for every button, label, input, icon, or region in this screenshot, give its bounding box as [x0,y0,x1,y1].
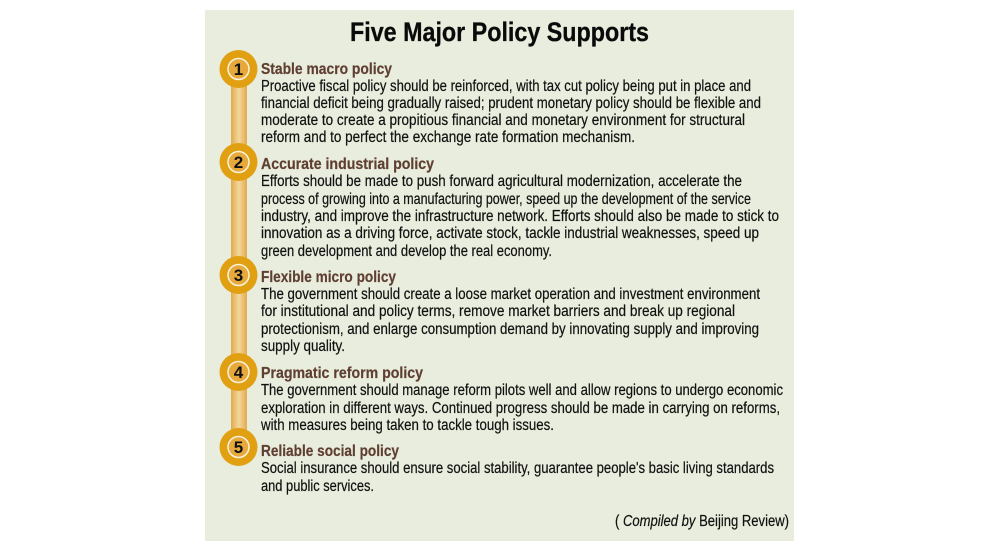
section 1: stable macro policy [261,61,761,146]
section 4: pragmatic reform policy: exploration in different ways. Continued progress should be made in carrying on reforms, [261,400,780,417]
icon: number badge 1 [220,50,258,88]
section 3: flexible micro policy [261,269,761,355]
source credit: ( Compiled by Beijing Review) [615,513,789,530]
icon: number badge 3 [220,256,258,294]
section 2: accurate industrial policy: Efforts should be made to push forward agricultural modernization, accelerate the [261,173,742,190]
section 5: reliable social policy [261,443,774,495]
section 2: accurate industrial policy: industry, and improve the infrastructure network. Efforts should also be made to stick to [261,208,779,225]
section 3: flexible micro policy: protectionism, and enlarge consumption demand by innovating supply and improving [261,321,759,338]
icon: number badge 4 [220,353,258,391]
section 3: flexible micro policy: The government should create a loose market operation and investment environment [261,286,761,303]
section 5: reliable social policy: Reliable social policy [261,443,399,460]
section 1: stable macro policy: Stable macro policy [261,61,392,78]
section 1: stable macro policy: financial deficit being gradually raised; prudent monetary policy should be flexible and [261,95,761,112]
section 2: accurate industrial policy: green development and develop the real economy. [261,243,552,260]
title: Five Major Policy Supports [350,17,649,47]
section 1: stable macro policy: reform and to perfect the exchange rate formation mechanism. [261,129,635,146]
section 4: pragmatic reform policy: Pragmatic reform policy [261,365,423,382]
section 2: accurate industrial policy: innovation as a driving force, activate stock, tackle industrial weaknesses, speed up [261,225,759,242]
section 5: reliable social policy: Social insurance should ensure social stability, guarantee people's basic living standards [261,460,774,477]
section 3: flexible micro policy: Flexible micro policy [261,269,396,286]
icon: number badge 5 [220,428,258,466]
icon: number badge 2 [220,143,258,181]
panel: background [205,10,794,541]
section 3: flexible micro policy: supply quality. [261,338,345,355]
icon: number badge 4: 4 [234,363,244,382]
icon: number badge 3: 3 [234,266,243,285]
section 5: reliable social policy: and public services. [261,478,374,495]
section 3: flexible micro policy: for institutional and policy terms, remove market barriers and break up regional [261,303,735,320]
section 4: pragmatic reform policy: The government should manage reform pilots well and allow regions to undergo economic [261,382,783,399]
section 2: accurate industrial policy: process of growing into a manufacturing power, speed up the development of the service [261,191,751,208]
section 2: accurate industrial policy: Accurate industrial policy [261,156,434,173]
icon: number badge 5: 5 [234,438,243,457]
icon: number badge 2: 2 [234,153,243,172]
timeline connector [231,85,247,434]
icon: number badge 1: 1 [234,60,243,79]
section 1: stable macro policy: Proactive fiscal policy should be reinforced, with tax cut policy being put in place and [261,78,751,95]
section 4: pragmatic reform policy [260,365,783,434]
section 4: pragmatic reform policy: with measures being taken to tackle tough issues. [260,417,554,434]
section 1: stable macro policy: moderate to create a propitious financial and monetary environment for structural [261,112,745,129]
section 2: accurate industrial policy [261,156,779,260]
